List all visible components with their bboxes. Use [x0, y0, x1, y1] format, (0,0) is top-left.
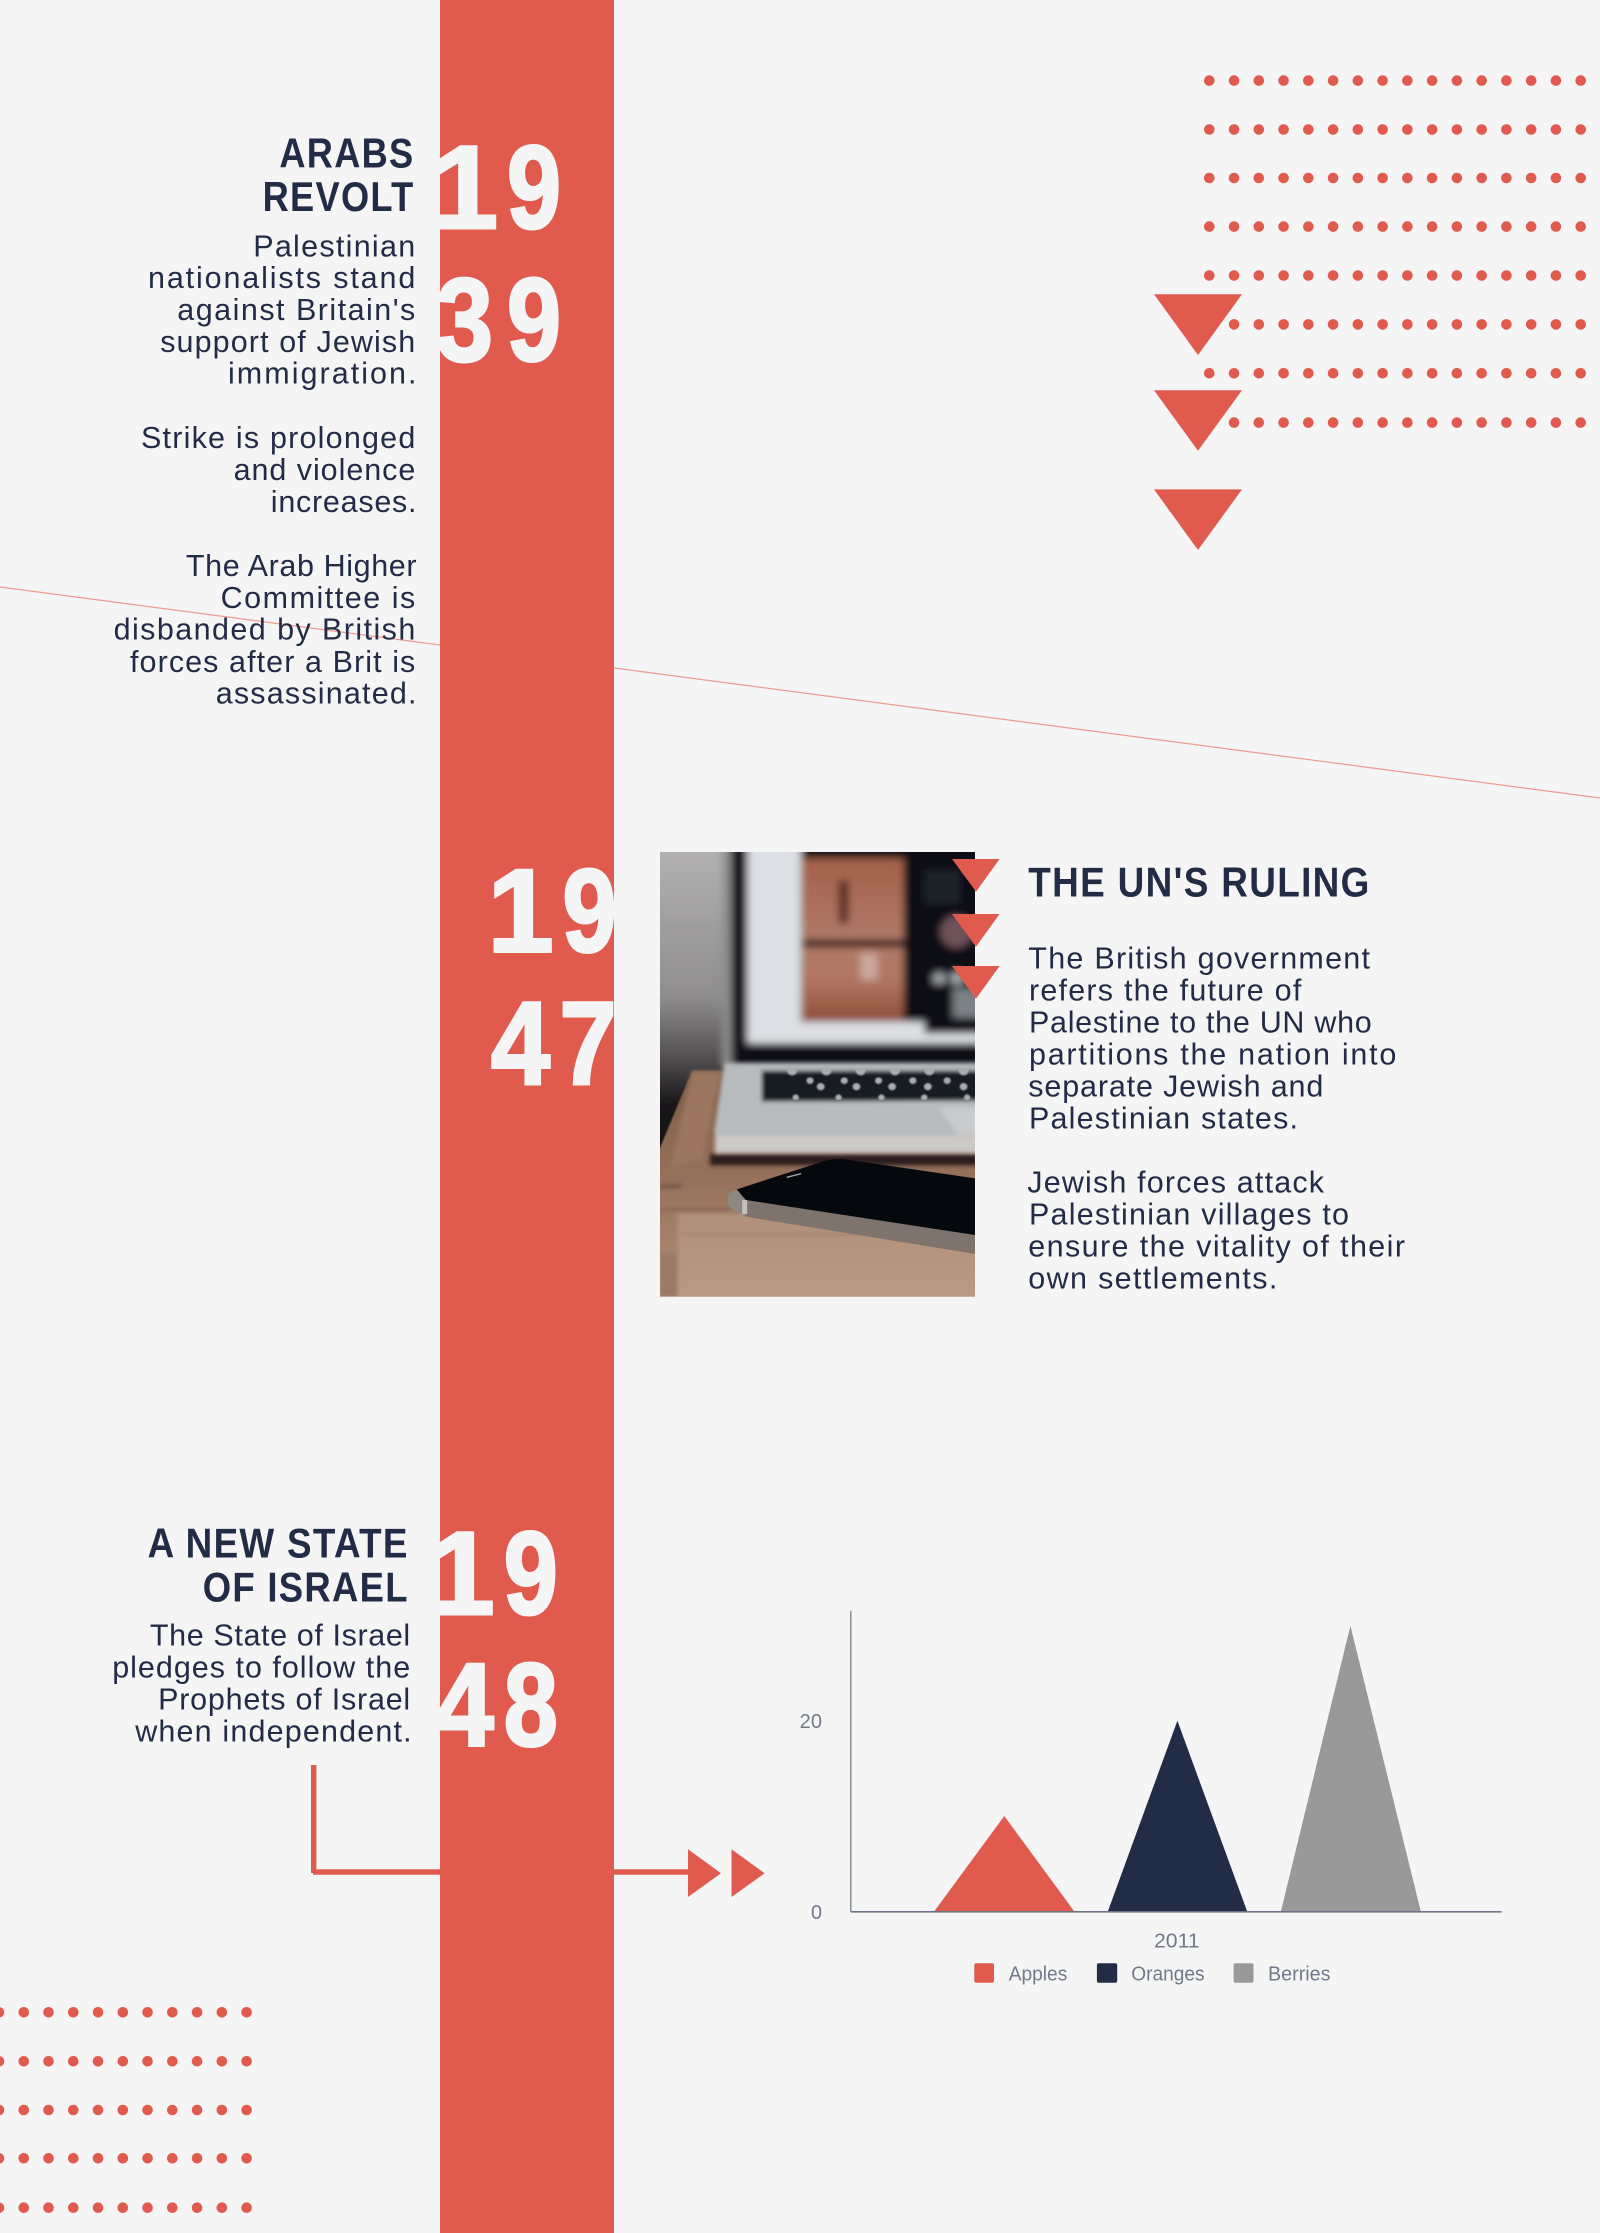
text block: Arabs revolt body: support of Jewish	[160, 325, 415, 359]
text block: UN ruling body: ensure the vitality of their	[1028, 1230, 1405, 1264]
dot pattern: top right	[1209, 81, 1582, 423]
panel: 1948 new state	[112, 1508, 765, 1897]
triangle bar: oranges	[1108, 1721, 1247, 1911]
text block: UN ruling body	[1027, 942, 1405, 1296]
heading: A new state of Israel: OF ISRAEL	[203, 1564, 409, 1611]
year: 1939: 3	[436, 254, 493, 386]
text block: new state body: Prophets of Israel	[158, 1683, 410, 1717]
text block: new state body	[112, 1619, 412, 1749]
dot pattern: bottom left	[0, 2012, 248, 2208]
text block: UN ruling body: partitions the nation into	[1029, 1038, 1396, 1072]
heading: Arabs revolt: ARABS	[279, 129, 414, 176]
text block: Arabs revolt body: Committee is	[221, 581, 415, 615]
chart axis labels	[800, 1711, 1200, 1952]
text block: UN ruling body: Palestine to the UN who	[1029, 1006, 1372, 1040]
text block: Arabs revolt body: The Arab Higher	[186, 549, 416, 583]
heading: The UN's ruling: THE UN'S RULING	[1028, 859, 1371, 906]
chart legend: Apples	[1009, 1964, 1067, 1986]
icon: three small down triangles over photo	[952, 859, 1000, 999]
text block: Arabs revolt body: and violence	[234, 453, 415, 487]
year: 1947: 4	[491, 978, 550, 1110]
text block: UN ruling body: Jewish forces attack	[1027, 1166, 1325, 1200]
year: 1939: 1	[432, 122, 498, 254]
text block: Arabs revolt body: assassinated.	[216, 677, 416, 711]
icon: three down triangles top right	[1154, 294, 1242, 550]
text block: Arabs revolt body: against Britain's	[177, 293, 415, 327]
timeline vertical bar	[440, 0, 614, 2233]
text block: Arabs revolt body: Strike is prolonged	[141, 421, 415, 455]
photo: laptop and phone on a wooden desk	[660, 852, 975, 1297]
text block: UN ruling body: The British government	[1028, 942, 1371, 976]
text block: new state body: pledges to follow the	[112, 1651, 410, 1685]
bar chart	[800, 1611, 1502, 1986]
year: 1939: 9	[507, 122, 561, 254]
diagonal line	[0, 587, 1600, 798]
heading: A new state of Israel	[148, 1519, 409, 1611]
year: 1947: 1	[488, 846, 554, 978]
chart axis labels: 2011	[1154, 1930, 1200, 1952]
text block: UN ruling body: refers the future of	[1029, 974, 1302, 1008]
text block: new state body: The State of Israel	[150, 1619, 410, 1653]
chart axis labels: 20	[800, 1711, 822, 1733]
heading: Arabs revolt: REVOLT	[263, 173, 415, 220]
text block: UN ruling body: separate Jewish and	[1028, 1070, 1323, 1104]
triangle bar: berries	[1281, 1626, 1421, 1911]
year: 1947	[488, 846, 616, 1110]
chart axis labels: 0	[811, 1902, 822, 1924]
year: 1947: 7	[560, 978, 616, 1110]
arrow: connector from text to chart	[311, 1765, 765, 1897]
text block: Arabs revolt body: forces after a Brit is	[130, 645, 415, 679]
year: 1948: 9	[504, 1508, 558, 1640]
text block: Arabs revolt body: Palestinian	[253, 229, 415, 263]
chart legend: Berries	[1268, 1964, 1330, 1986]
text block: UN ruling body: Palestinian villages to	[1029, 1198, 1349, 1232]
panel: 1947 UN ruling	[488, 840, 1405, 1307]
text block: Arabs revolt body: increases.	[271, 485, 416, 519]
year: 1948	[429, 1508, 558, 1772]
table	[649, 1071, 981, 1307]
text block: UN ruling body: own settlements.	[1028, 1262, 1277, 1296]
heading: Arabs revolt	[263, 129, 415, 220]
text block: Arabs revolt body: nationalists stand	[148, 261, 415, 295]
text block: Arabs revolt body	[114, 229, 416, 711]
heading: A new state of Israel: A NEW STATE	[148, 1519, 409, 1566]
year: 1948: 8	[504, 1640, 558, 1772]
text block: UN ruling body: Palestinian states.	[1029, 1102, 1298, 1136]
panel: 1939 Arabs revolt	[114, 122, 561, 711]
chart axes	[851, 1611, 1502, 1912]
year: 1939: 9	[507, 254, 561, 386]
year: 1947: 9	[562, 846, 616, 978]
triangle bar: apples	[934, 1816, 1074, 1911]
chart legend	[974, 1963, 1330, 1986]
text block: Arabs revolt body: disbanded by British	[114, 613, 415, 647]
text block: new state body: when independent.	[134, 1715, 412, 1749]
year: 1948: 4	[435, 1640, 494, 1772]
year: 1948: 1	[429, 1508, 495, 1640]
year: 1939	[432, 122, 561, 386]
chart legend: Oranges	[1131, 1964, 1204, 1986]
text block: Arabs revolt body: immigration.	[228, 357, 416, 391]
